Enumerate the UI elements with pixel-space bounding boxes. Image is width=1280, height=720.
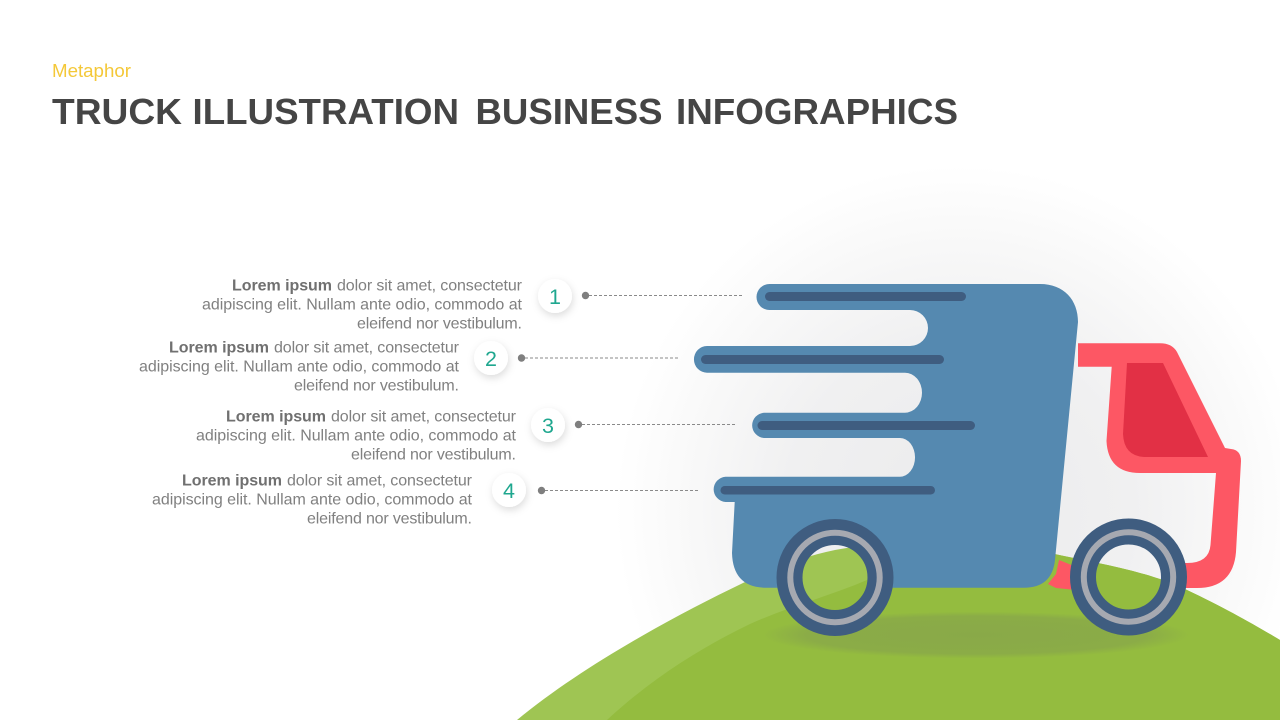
item 2 <box>139 340 680 394</box>
item 1 badge <box>538 279 572 313</box>
item 1 text <box>202 278 523 332</box>
item 2 badge: 2 <box>485 347 497 371</box>
rear wheel <box>790 532 880 623</box>
title: BUSINESS <box>476 91 662 132</box>
item 4 connector <box>538 487 700 494</box>
item 2 badge <box>474 341 508 375</box>
item 1 text: eleifend nor vestibulum. <box>357 316 522 332</box>
item 3 text: eleifend nor vestibulum. <box>351 446 516 464</box>
item 1 connector <box>582 292 743 299</box>
green hill <box>517 541 1280 720</box>
truck cab <box>1048 343 1241 590</box>
item 4 text: dolor sit amet, consectetur <box>287 472 473 490</box>
header text <box>52 60 958 132</box>
dark bar 1 <box>765 292 966 301</box>
background glow <box>615 165 1280 720</box>
dark bar 2 <box>701 355 944 364</box>
item 4 text: Lorem ipsum <box>182 472 282 490</box>
item 2 text: adipiscing elit. Nullam ante odio, commodo at <box>139 358 460 376</box>
item 1 text: Lorem ipsum <box>232 278 332 294</box>
item 4 text: eleifend nor vestibulum. <box>307 510 472 528</box>
truck shadow <box>763 612 1189 658</box>
cab window <box>1123 363 1208 457</box>
cargo body with speed bars <box>694 284 1078 588</box>
item 2 text: dolor sit amet, consectetur <box>274 340 460 356</box>
item 3 text: dolor sit amet, consectetur <box>331 408 517 426</box>
title: ILLUSTRATION <box>192 91 459 132</box>
item 1 badge: 1 <box>549 285 561 309</box>
item 4 <box>152 472 700 528</box>
red bumper piece <box>1048 560 1076 590</box>
item 4 badge: 4 <box>503 479 515 503</box>
subtitle: Metaphor <box>52 60 131 81</box>
truck <box>694 284 1241 623</box>
item 3 text <box>196 408 517 464</box>
dark bar 4 <box>720 486 935 494</box>
front wheel <box>1083 532 1174 622</box>
item 3 text: adipiscing elit. Nullam ante odio, commodo at <box>196 428 517 444</box>
title: TRUCK <box>52 91 182 132</box>
item 4 text: adipiscing elit. Nullam ante odio, commodo at <box>152 492 473 508</box>
item 3 badge <box>531 408 565 442</box>
dark bar 3 <box>758 421 975 430</box>
item 3 <box>196 408 737 464</box>
title: INFOGRAPHICS <box>676 91 958 132</box>
item 2 connector <box>518 354 680 362</box>
item 2 text: Lorem ipsum <box>169 340 269 356</box>
item 1 text: adipiscing elit. Nullam ante odio, commodo at <box>202 296 523 314</box>
item 1 text: dolor sit amet, consectetur <box>337 278 523 294</box>
item 3 connector <box>575 421 737 428</box>
item 2 text <box>139 340 460 394</box>
item 3 text: Lorem ipsum <box>226 408 326 426</box>
hill main <box>607 549 1280 720</box>
item 2 text: eleifend nor vestibulum. <box>294 378 459 394</box>
hill light edge <box>517 541 1280 720</box>
item 1 <box>202 278 743 332</box>
item 4 text <box>152 472 473 528</box>
cab frame <box>1078 343 1241 588</box>
item 4 badge <box>492 473 526 507</box>
item 3 badge: 3 <box>542 414 554 438</box>
